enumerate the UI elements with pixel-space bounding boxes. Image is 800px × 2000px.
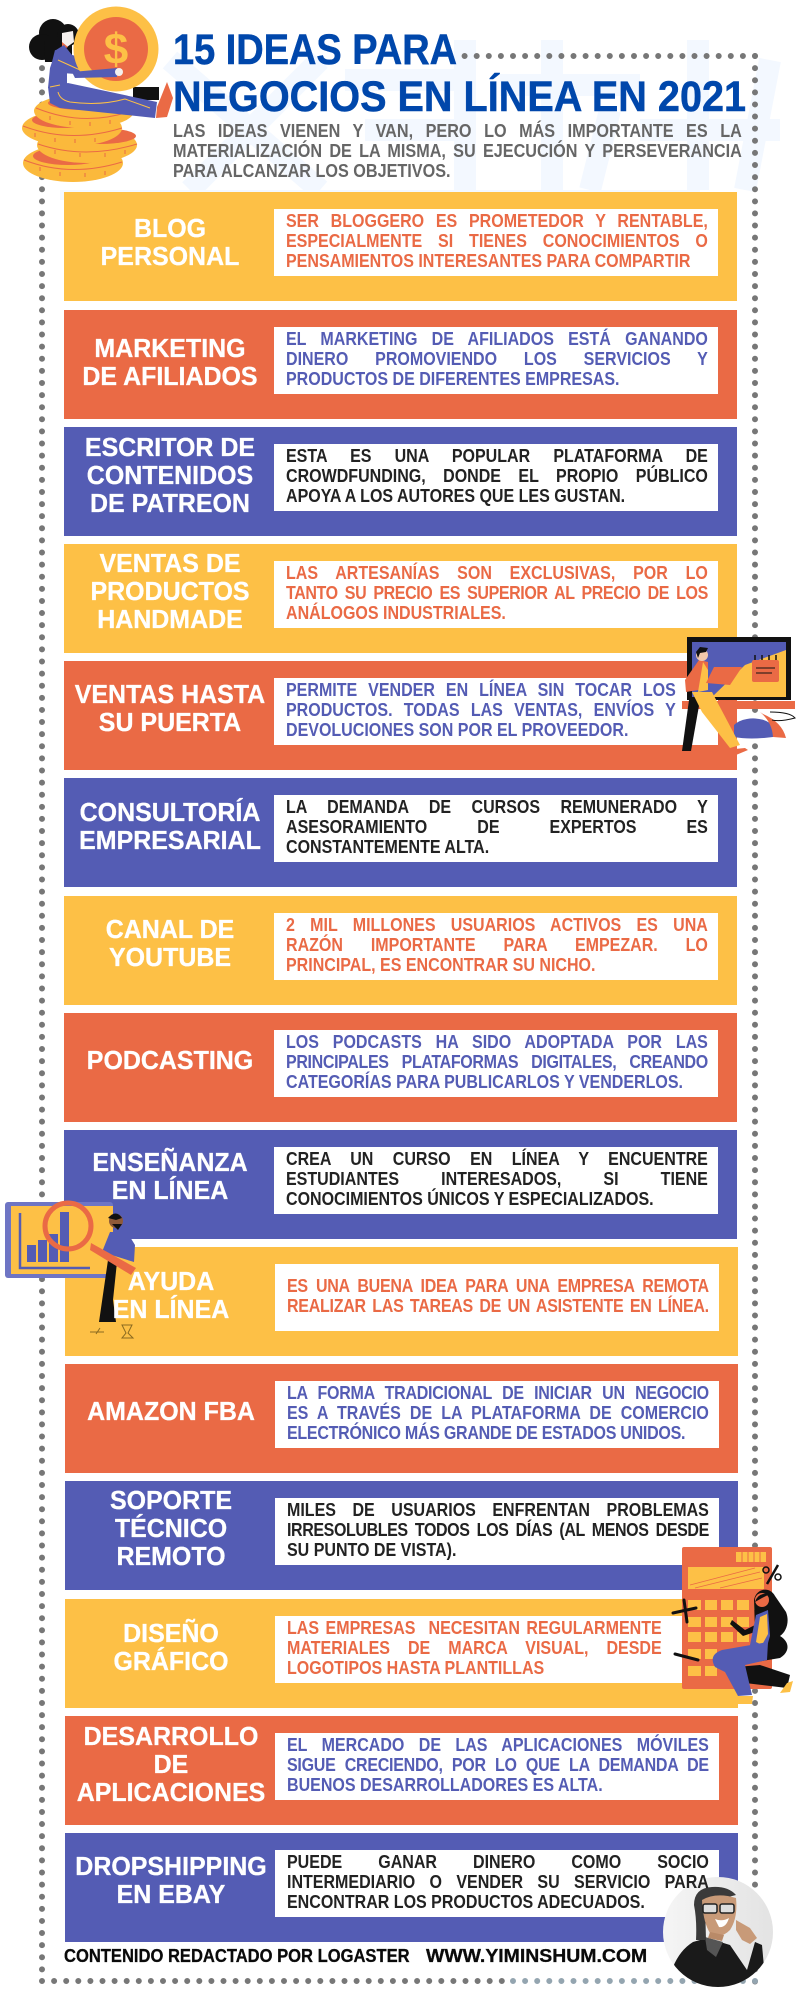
- card title: [75, 1851, 267, 1909]
- card description: CONSTANTEMENTE ALTA.: [286, 837, 489, 857]
- card title: [101, 213, 239, 271]
- card description: [274, 678, 718, 745]
- card description: PENSAMIENTOS INTERESANTES PARA COMPARTIR: [286, 251, 690, 271]
- card description: [274, 561, 718, 628]
- panel: dropshipping en ebay: [65, 1833, 738, 1942]
- card description: APOYA A LOS AUTORES QUE LES GUSTAN.: [286, 486, 625, 506]
- card title: CONTENIDOS: [87, 460, 253, 490]
- intro text: MATERIALIZACIÓN DE LA MISMA, SU EJECUCIÓN Y PERSEVERANCIA: [173, 141, 742, 161]
- card description: SER BLOGGERO ES PROMETEDOR Y RENTABLE,: [286, 211, 708, 231]
- card title: [85, 432, 255, 518]
- icon: man presenting at monitor: [682, 637, 796, 754]
- card title: AMAZON FBA: [87, 1396, 255, 1426]
- card title: CONSULTORÍA: [80, 797, 260, 827]
- card description: ESPECIALMENTE SI TIENES CONOCIMIENTOS O: [286, 231, 708, 251]
- card description: 2 MIL MILLONES USUARIOS ACTIVOS ES UNA: [286, 915, 708, 935]
- card description: PRODUCTOS. TODAS LAS VENTAS, ENVÍOS Y: [286, 700, 676, 720]
- card title: DESARROLLO: [84, 1721, 258, 1751]
- icon: man with magnifying glass: [5, 1200, 136, 1338]
- card title: PRODUCTOS: [90, 576, 250, 606]
- card description: REALIZAR LAS TAREAS DE UN ASISTENTE EN LÍNEA.: [287, 1296, 709, 1316]
- card description: ENCONTRAR LOS PRODUCTOS ADECUADOS.: [287, 1892, 645, 1912]
- card description: CROWDFUNDING, DONDE EL PROPIO PÚBLICO: [286, 466, 708, 486]
- card description: DINERO PROMOVIENDO LOS SERVICIOS Y: [286, 349, 708, 369]
- card title: MARKETING: [94, 333, 246, 363]
- card description: [275, 1264, 719, 1331]
- card description: ESTA ES UNA POPULAR PLATAFORMA DE: [286, 446, 708, 466]
- card description: SIGUE CRECIENDO, POR LO QUE LA DEMANDA DE: [287, 1755, 709, 1775]
- panel: consultoria empresarial: [64, 778, 737, 887]
- panel: soporte tecnico remoto: [65, 1481, 738, 1590]
- card description: INTERMEDIARIO O VENDER SU SERVICIO PARA: [287, 1872, 709, 1892]
- card description: ELECTRÓNICO MÁS GRANDE DE ESTADOS UNIDOS.: [287, 1423, 685, 1443]
- card description: RAZÓN IMPORTANTE PARA EMPEZAR. LO: [286, 935, 708, 955]
- card description: [274, 209, 718, 276]
- card description: CONOCIMIENTOS ÚNICOS Y ESPECIALIZADOS.: [286, 1189, 654, 1209]
- card description: [274, 327, 718, 394]
- card description: LOGOTIPOS HASTA PLANTILLAS: [287, 1658, 544, 1678]
- card title: DE PATREON: [90, 488, 250, 518]
- card title: SU PUERTA: [99, 707, 241, 737]
- panel: ventas hasta su puerta: [64, 661, 737, 770]
- card description: LAS ARTESANÍAS SON EXCLUSIVAS, POR LO: [286, 563, 708, 583]
- icon: woman with calculator: [672, 1547, 793, 1704]
- photo: author portrait: [663, 1877, 773, 1987]
- card title: DE AFILIADOS: [82, 361, 258, 391]
- card description: LAS EMPRESAS NECESITAN REGULARMENTE: [287, 1618, 662, 1638]
- card description: PRINCIPAL, ES ENCONTRAR SU NICHO.: [286, 955, 595, 975]
- card title: CANAL DE: [106, 914, 234, 944]
- card description: ESTUDIANTES INTERESADOS, SI TIENE: [286, 1169, 708, 1189]
- card description: [274, 1030, 718, 1097]
- icon: woman sitting on coins: [22, 6, 173, 182]
- card title: [79, 797, 261, 855]
- card description: SU PUNTO DE VISTA).: [287, 1540, 456, 1560]
- title: [173, 27, 746, 121]
- card description: [274, 1147, 718, 1214]
- card title: PODCASTING: [87, 1045, 253, 1075]
- card description: MATERIALES DE MARCA VISUAL, DESDE: [287, 1638, 662, 1658]
- card description: PUEDE GANAR DINERO COMO SOCIO: [287, 1852, 709, 1872]
- card description: CATEGORÍAS PARA PUBLICARLOS Y VENDERLOS.: [286, 1072, 683, 1092]
- icon: woman sitting on coins: $: [104, 25, 128, 74]
- card description: [275, 1381, 719, 1448]
- card title: TÉCNICO: [115, 1513, 227, 1543]
- card description: [275, 1498, 719, 1565]
- card description: MILES DE USUARIOS ENFRENTAN PROBLEMAS: [287, 1500, 709, 1520]
- card description: EL MARKETING DE AFILIADOS ESTÁ GANANDO: [286, 329, 708, 349]
- panel: desarrollo de aplicaciones: [65, 1716, 738, 1825]
- card title: [113, 1618, 229, 1676]
- card title: [82, 333, 258, 391]
- card title: YOUTUBE: [109, 942, 231, 972]
- card title: [77, 1721, 265, 1807]
- intro text: [173, 120, 742, 181]
- intro text: PARA ALCANZAR LOS OBJETIVOS.: [173, 161, 451, 181]
- panel: amazon fba: [65, 1364, 738, 1473]
- card description: TANTO SU PRECIO ES SUPERIOR AL PRECIO DE LOS: [286, 583, 708, 603]
- card description: [274, 444, 718, 511]
- panel: escritor de contenidos: [64, 427, 737, 536]
- card title: APLICACIONES: [77, 1777, 265, 1807]
- card description: LA DEMANDA DE CURSOS REMUNERADO Y: [286, 797, 708, 817]
- card title: [90, 548, 250, 634]
- card title: ESCRITOR DE: [85, 432, 255, 462]
- card title: REMOTO: [116, 1541, 226, 1571]
- card description: EL MERCADO DE LAS APLICACIONES MÓVILES: [287, 1735, 709, 1755]
- card description: PRINCIPALES PLATAFORMAS DIGITALES, CREANDO: [286, 1052, 708, 1072]
- card title: DISEÑO: [123, 1618, 219, 1648]
- footer credits: WWW.YIMINSHUM.COM: [426, 1945, 647, 1966]
- card description: [274, 913, 718, 980]
- card description: ANÁLOGOS INDUSTRIALES.: [286, 603, 506, 623]
- card description: CREA UN CURSO EN LÍNEA Y ENCUENTRE: [286, 1149, 708, 1169]
- card title: [113, 1266, 229, 1324]
- card description: [274, 795, 718, 862]
- panel: ensenanza en linea: [64, 1130, 737, 1239]
- card description: BUENOS DESARROLLADORES ES ALTA.: [287, 1775, 603, 1795]
- card title: [106, 914, 234, 972]
- card description: [275, 1733, 719, 1800]
- card title: BLOG: [134, 213, 206, 243]
- card description: [275, 1850, 719, 1917]
- background watermark: [60, 40, 780, 200]
- title: NEGOCIOS EN LÍNEA EN 2021: [173, 74, 746, 121]
- card description: ES A TRAVÉS DE LA PLATAFORMA DE COMERCIO: [287, 1403, 709, 1423]
- card description: ASESORAMIENTO DE EXPERTOS ES: [286, 817, 708, 837]
- panel: blog personal: [64, 192, 737, 301]
- panel: podcasting: [64, 1013, 737, 1122]
- title: 15 IDEAS PARA: [173, 27, 457, 74]
- card title: EMPRESARIAL: [79, 825, 261, 855]
- panel: canal de youtube: [64, 896, 737, 1005]
- card title: ENSEÑANZA: [92, 1147, 248, 1177]
- card description: [275, 1616, 719, 1683]
- card title: HANDMADE: [97, 604, 243, 634]
- card title: [74, 679, 265, 737]
- card title: [92, 1147, 248, 1205]
- card title: DE: [154, 1749, 188, 1779]
- card title: EN LÍNEA: [112, 1175, 228, 1205]
- card description: IRRESOLUBLES TODOS LOS DÍAS (AL MENOS DESDE: [287, 1520, 709, 1540]
- card title: VENTAS HASTA: [75, 679, 265, 709]
- card description: PRODUCTOS DE DIFERENTES EMPRESAS.: [286, 369, 620, 389]
- panel: ayuda en linea: [65, 1247, 738, 1356]
- panel: diseno grafico: [65, 1599, 738, 1708]
- card description: LOS PODCASTS HA SIDO ADOPTADA POR LAS: [286, 1032, 708, 1052]
- card title: [110, 1485, 232, 1571]
- card description: LA FORMA TRADICIONAL DE INICIAR UN NEGOCIO: [287, 1383, 709, 1403]
- card title: EN LÍNEA: [113, 1294, 229, 1324]
- footer credits: CONTENIDO REDACTADO POR LOGASTER: [64, 1945, 410, 1966]
- card description: ES UNA BUENA IDEA PARA UNA EMPRESA REMOTA: [287, 1276, 709, 1296]
- card title: DROPSHIPPING: [75, 1851, 267, 1881]
- panel: marketing de afiliados: [64, 310, 737, 419]
- card title: SOPORTE: [110, 1485, 232, 1515]
- footer credits: [64, 1945, 647, 1966]
- card title: AYUDA: [128, 1266, 214, 1296]
- card title: VENTAS DE: [100, 548, 240, 578]
- card title: EN EBAY: [117, 1879, 225, 1909]
- card description: DEVOLUCIONES SON POR EL PROVEEDOR.: [286, 720, 628, 740]
- card title: PERSONAL: [101, 241, 239, 271]
- intro text: LAS IDEAS VIENEN Y VAN, PERO LO MÁS IMPORTANTE ES LA: [173, 121, 742, 141]
- card title: GRÁFICO: [113, 1646, 229, 1676]
- card description: PERMITE VENDER EN LÍNEA SIN TOCAR LOS: [286, 680, 676, 700]
- panel: ventas de productos handmade: [64, 544, 737, 653]
